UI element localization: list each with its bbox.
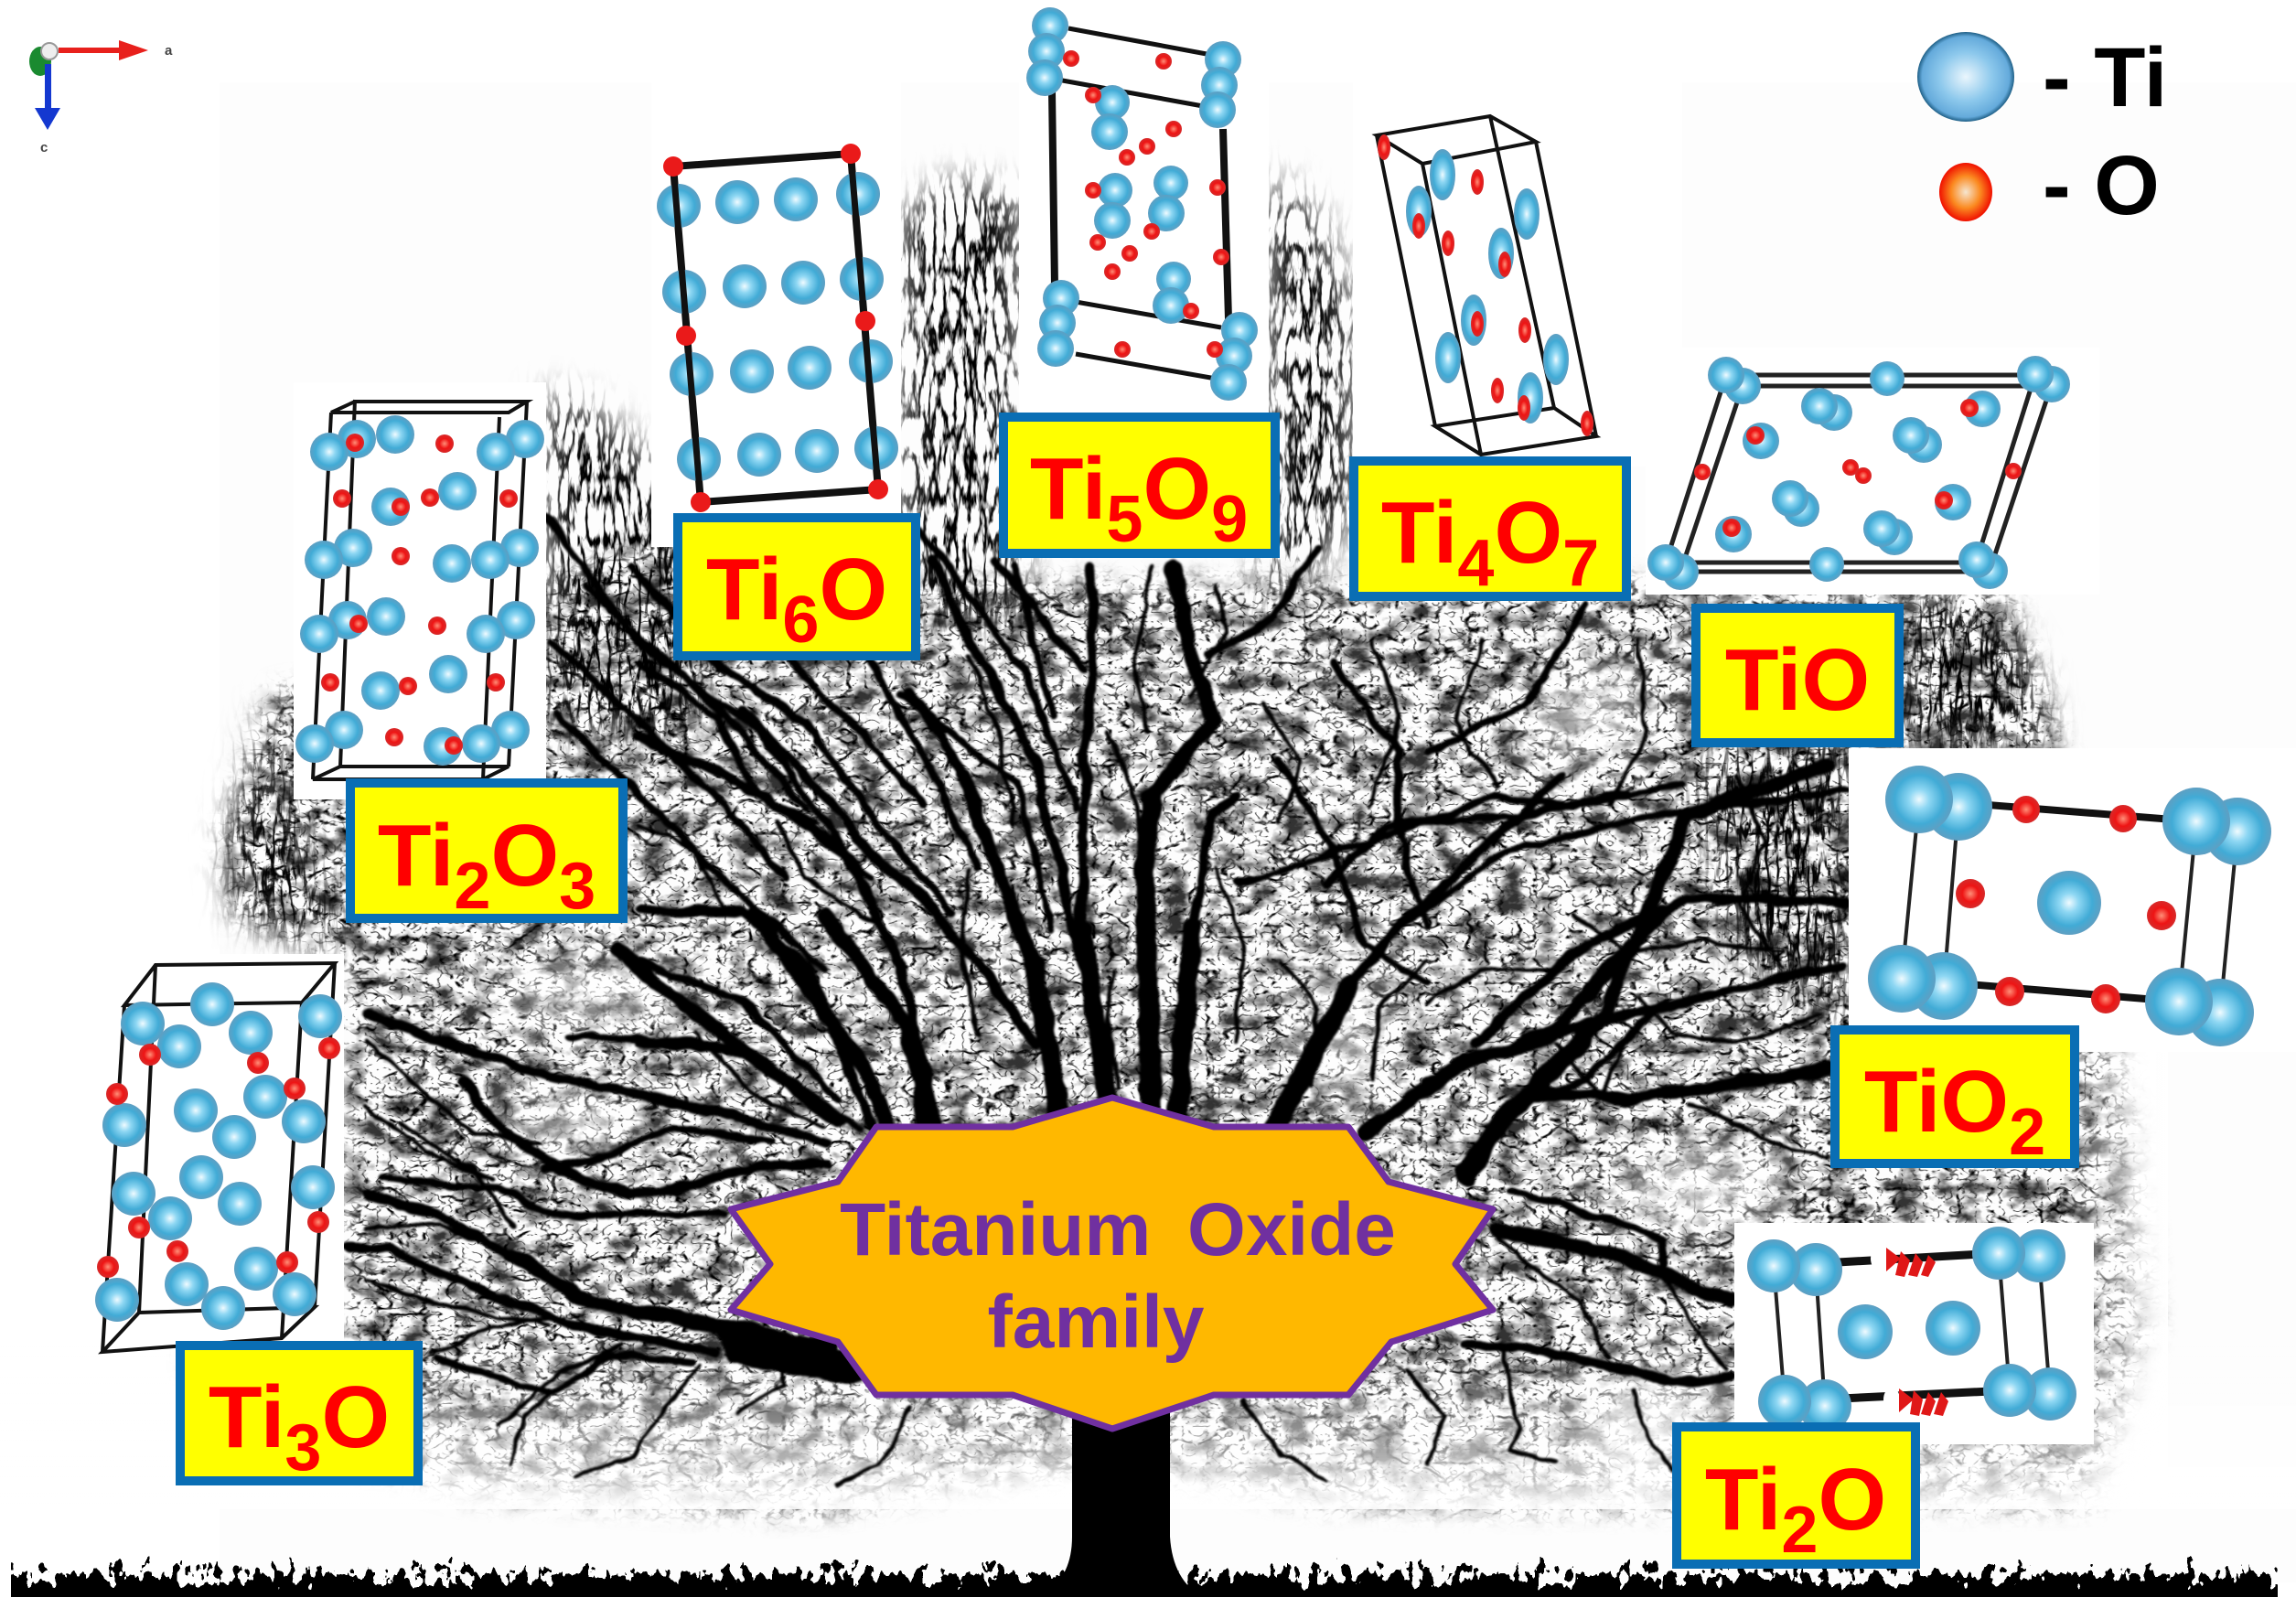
label: TiO2: TiO [1864, 1053, 2009, 1151]
legend: Ti [1917, 31, 2167, 124]
crystal: TiO [1647, 356, 2070, 590]
crystal: Ti4O7 [1377, 116, 1596, 455]
axis indicator [29, 40, 173, 155]
label: Ti3O: O [321, 1368, 390, 1466]
crystal: Ti6O [657, 144, 898, 512]
label: Ti3O: 3 [284, 1411, 321, 1485]
trunk [1038, 1409, 1203, 1597]
legend: O [1939, 139, 2160, 232]
label: Ti2O3: 2 [454, 850, 490, 923]
label: Ti2O: O [1818, 1451, 1886, 1549]
label: Ti4O7: O [1494, 484, 1562, 582]
label: Ti4O7: 4 [1457, 527, 1494, 600]
central badge: Titanium Oxide family: family [988, 1281, 1205, 1364]
label: Ti2O3 [350, 783, 623, 923]
label: Ti3O [180, 1346, 418, 1485]
label: Ti5O9: 5 [1106, 483, 1143, 556]
label: Ti2O3: O [490, 807, 559, 905]
central badge: Titanium Oxide family: Titanium Oxide [840, 1188, 1396, 1271]
ground grass [0, 1575, 2296, 1612]
label: Ti3O: Ti [209, 1368, 284, 1466]
label: Ti4O7: 7 [1562, 527, 1599, 600]
central badge: Titanium Oxide family [731, 1098, 1493, 1429]
label: Ti5O9: O [1143, 440, 1211, 538]
legend [1917, 31, 2167, 232]
crystal: Ti2O3 [295, 400, 544, 779]
label: Ti5O9 [1003, 417, 1275, 556]
label: Ti2O3: 3 [559, 850, 595, 923]
label: Ti4O7: Ti [1381, 484, 1457, 582]
label: TiO2 [1835, 1030, 2075, 1169]
axis indicator: a [165, 43, 173, 59]
crystal: TiO2 [1868, 766, 2271, 1046]
branches [348, 516, 1845, 1484]
legend: O: - O [2043, 139, 2160, 232]
crystal: Ti2O [1747, 1227, 2076, 1432]
label: Ti2O: 2 [1781, 1494, 1818, 1567]
label: Ti5O9: Ti [1030, 440, 1106, 538]
label: Ti4O7 [1354, 461, 1626, 600]
label: Ti2O3: Ti [378, 807, 454, 905]
label: TiO2: 2 [2009, 1096, 2045, 1169]
label: Ti2O: Ti [1705, 1451, 1781, 1549]
label: Ti6O: 6 [782, 584, 819, 657]
label: Ti6O: Ti [706, 541, 782, 638]
label: Ti6O: O [819, 541, 887, 638]
label: TiO [1696, 608, 1899, 743]
branch wedge left of badge [713, 1328, 915, 1383]
label: TiO: TiO [1725, 631, 1870, 729]
crystal: Ti5O9 [1026, 7, 1258, 401]
legend: Ti: - Ti [2043, 31, 2167, 124]
axis indicator: c [40, 140, 48, 155]
label: Ti6O [678, 518, 916, 657]
label: Ti5O9: 9 [1211, 483, 1248, 556]
crystal: Ti3O [95, 963, 342, 1352]
label: Ti2O [1677, 1427, 1915, 1567]
